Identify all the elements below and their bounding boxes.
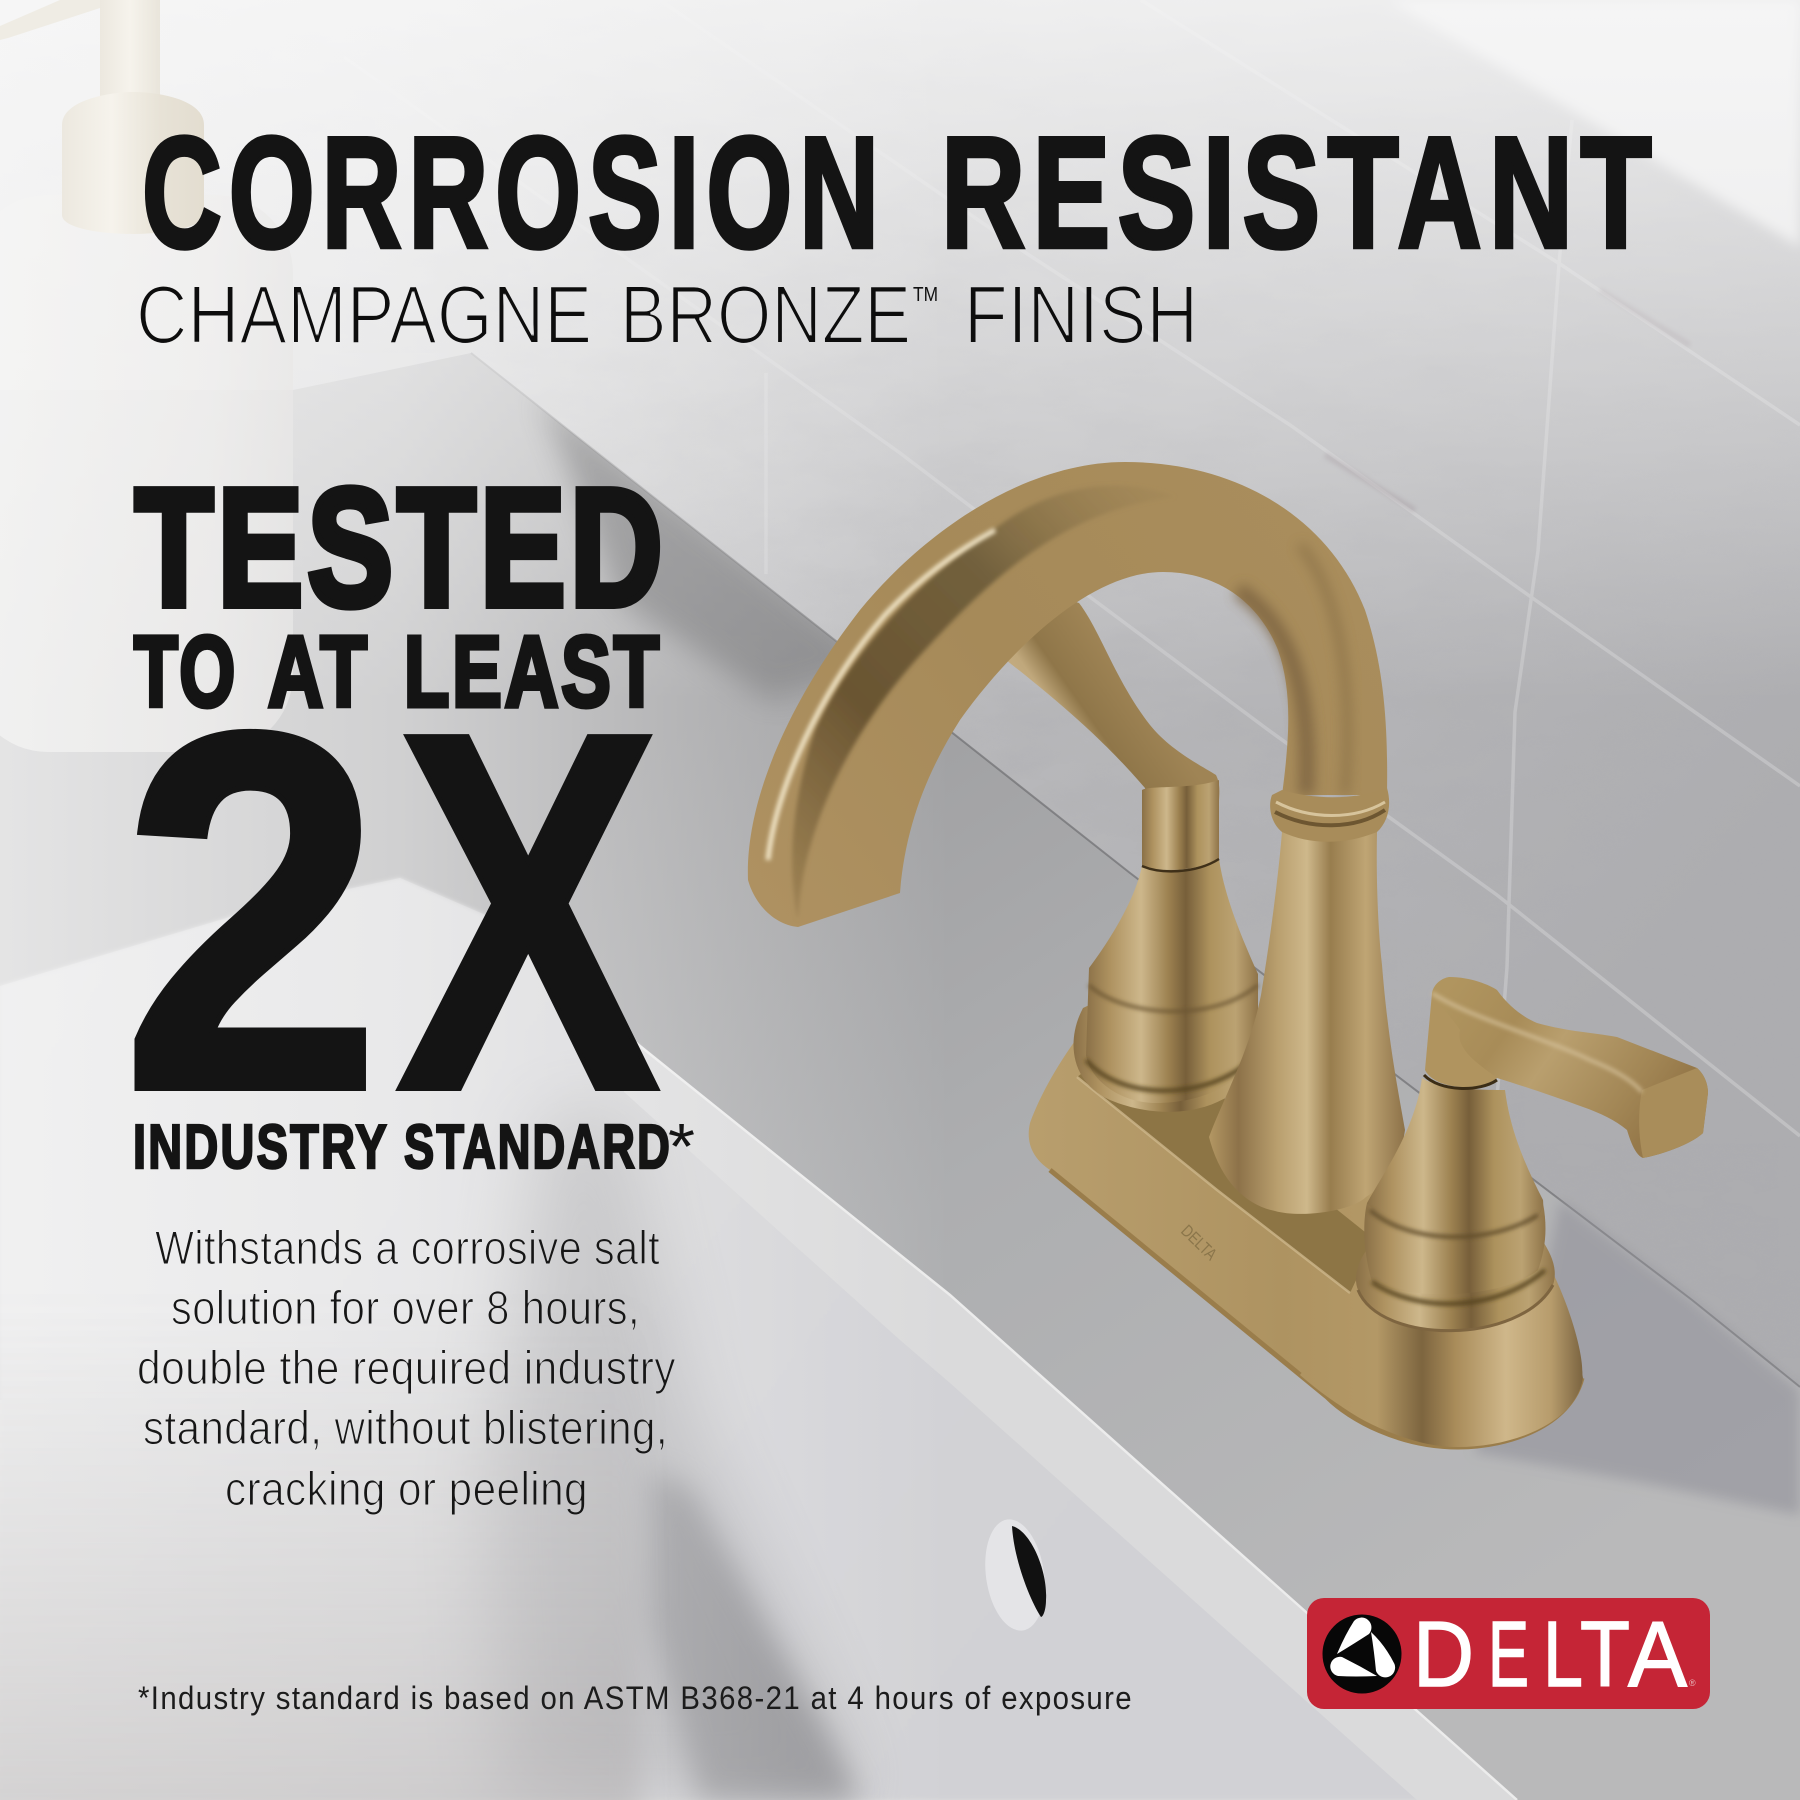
faucet cast shadow (1474, 1200, 1800, 1515)
to at least: TO (134, 616, 238, 728)
subheading: champagne bronze finish: CHAMPAGNE (136, 268, 592, 361)
subheading: champagne bronze finish: FINISH (964, 268, 1198, 361)
right handle skirt (1356, 1240, 1555, 1331)
industry standard: * (668, 1110, 695, 1183)
body paragraph: double the required industry (137, 1341, 676, 1394)
right handle base flare (1300, 1280, 1583, 1447)
spout (748, 462, 1387, 927)
spout neck shading (1238, 545, 1347, 795)
right handle (1300, 977, 1708, 1447)
counter front edge strip (624, 1038, 1517, 1800)
industry standard: STANDARD (404, 1113, 672, 1182)
faucet base plate (1029, 1030, 1582, 1447)
2x: X (396, 627, 662, 1197)
tile wall (392, 48, 1800, 1386)
faucet (748, 462, 1708, 1447)
logo wordmark: E (1488, 1602, 1529, 1706)
2x: 2 (121, 627, 382, 1197)
sink basin (0, 878, 1480, 1800)
engraved logo on plate: DELTA (1177, 1221, 1221, 1264)
footnote: *Industry standard is based on ASTM B368-21 at 4 hours of exposure (138, 1680, 1133, 1716)
subheading: champagne bronze finish (136, 268, 1198, 361)
subheading: champagne bronze finish: TM (913, 284, 938, 306)
logo wordmark: T (1580, 1602, 1630, 1706)
logo wordmark: L (1543, 1602, 1583, 1706)
right handle stem (1425, 993, 1515, 1087)
left handle (1074, 780, 1258, 1112)
logo wordmark: D (1413, 1602, 1474, 1706)
body paragraph: solution for over 8 hours, (171, 1281, 640, 1334)
overflow hole (978, 1516, 1052, 1634)
industry standard: INDUSTRY (133, 1113, 389, 1182)
to at least (134, 616, 662, 728)
right handle lever (1432, 977, 1708, 1158)
body paragraph: standard, without blistering, (143, 1401, 668, 1454)
to at least: AT (268, 616, 370, 728)
icon: delta triangle mark (1322, 1614, 1402, 1694)
spout highlight (768, 530, 995, 860)
spout shadow band (792, 486, 1175, 920)
industry standard (133, 1110, 695, 1183)
body paragraph (137, 1221, 676, 1515)
subheading: champagne bronze finish: BRONZE (620, 268, 911, 361)
logo wordmark: A (1628, 1602, 1687, 1706)
logo wordmark (1413, 1602, 1687, 1706)
spout collar (1270, 788, 1389, 842)
soap dispenser (0, 0, 293, 752)
to at least: LEAST (404, 616, 662, 728)
body paragraph: Withstands a corrosive salt (155, 1221, 660, 1274)
right handle cone (1367, 1078, 1543, 1240)
right handle cylinder (1364, 1203, 1545, 1294)
headline: tested to at least 2x industry standard (121, 455, 695, 1197)
counter back edge shadow line (471, 353, 1800, 1387)
2x (121, 627, 662, 1197)
delta logo: ® (1689, 1678, 1696, 1688)
spout pillar (1209, 832, 1405, 1214)
body paragraph: cracking or peeling (225, 1462, 588, 1515)
left handle lever (1002, 590, 1219, 810)
heading: corrosion resistant: CORROSION (142, 105, 886, 281)
delta logo (1307, 1598, 1710, 1709)
tested: TESTED (135, 455, 667, 641)
